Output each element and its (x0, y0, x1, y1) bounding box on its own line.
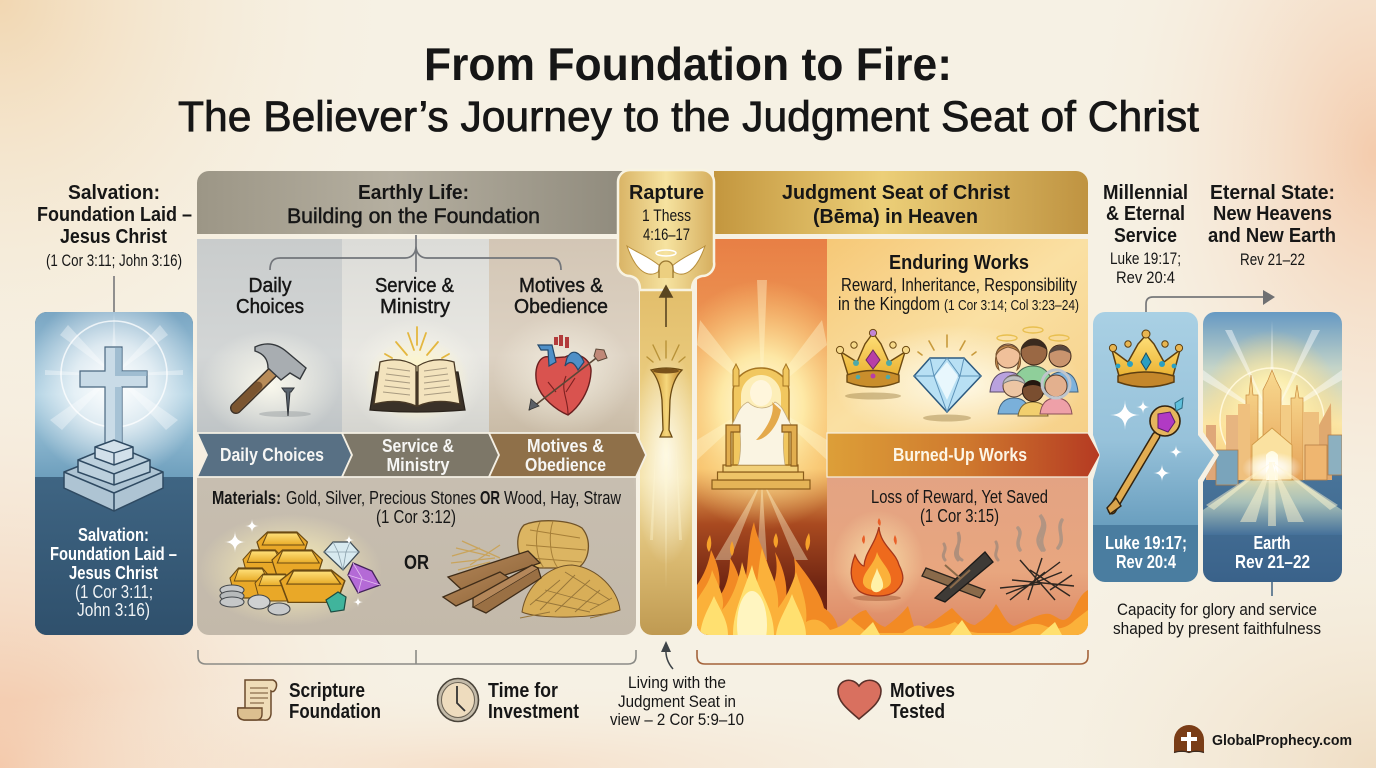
chevron: service and ministry: Service & (382, 436, 454, 456)
enduring works text: Enduring Works (889, 252, 1029, 274)
label: or: OR (404, 552, 429, 574)
arrow: millennial to eternal (1146, 290, 1275, 312)
heading: millennial and eternal service: Luke 19:17; (1110, 249, 1181, 268)
icon: gold, silver and gems (198, 514, 382, 626)
enduring works text (838, 252, 1079, 314)
text: card references (1105, 533, 1187, 572)
bracket: earthly life (198, 650, 636, 664)
legend: motives tested: Motives (890, 680, 955, 702)
icon: anatomical heart with arrow (529, 335, 607, 415)
heading: millennial and eternal service: Service (1114, 225, 1177, 247)
heading: eternal state: New Heavens (1213, 203, 1332, 225)
title (178, 38, 1199, 141)
arrow: up to rapture (661, 641, 673, 669)
panel: salvation card (35, 312, 193, 635)
icon: wood, hay and straw (443, 521, 620, 618)
icon: open bible (365, 327, 469, 422)
panel: earthly life header: Earthly Life: (358, 182, 469, 204)
heading: eternal state: and New Earth (1208, 225, 1336, 247)
icon: scroll (238, 680, 277, 720)
panel: earthly life header (197, 171, 630, 234)
materials text (212, 488, 622, 527)
icon: burnt twigs with smoke (1000, 515, 1074, 600)
heading: salvation: Jesus Christ (60, 226, 167, 248)
rapture text: 1 Thess (642, 206, 691, 225)
heading: eternal state: Rev 21–22 (1240, 250, 1305, 269)
text: card references: Rev 21–22 (1235, 552, 1310, 572)
panel: enduring works (836, 252, 1079, 422)
chevron: motives and obedience: Motives & (527, 436, 604, 456)
text: card references: Rev 20:4 (1116, 552, 1176, 572)
legend: motives tested (890, 680, 955, 723)
icon: scepter (1107, 398, 1183, 514)
bracket: judgment seat (697, 650, 1088, 664)
materials text: (1 Cor 3:12) (376, 507, 456, 527)
icon: crown (1109, 330, 1183, 387)
column labels (236, 275, 608, 318)
note: living with the judgment seat: Living with the (628, 673, 726, 692)
chevron: daily choices (197, 433, 352, 477)
panel: new heavens and new earth card (1202, 312, 1342, 582)
chevron: motives and obedience: Obedience (525, 455, 606, 475)
text: salvation card: Foundation Laid – (50, 544, 177, 564)
text: salvation card: John 3:16) (77, 600, 150, 620)
panel: judgment seat header: Judgment Seat of Christ (782, 181, 1010, 204)
column labels: Motives & (519, 275, 604, 297)
note: capacity for glory (1113, 600, 1321, 638)
legend: time for investment: Investment (488, 701, 579, 723)
materials text: Wood, Hay, Straw (504, 488, 622, 508)
logo: globalprophecy.com: GlobalProphecy.com (1212, 733, 1352, 749)
heading: salvation: (1 Cor 3:11; John 3:16) (46, 251, 182, 270)
heading: salvation: Salvation: (68, 182, 160, 204)
text: card references (1235, 533, 1310, 572)
icon: throne with seated figure (712, 364, 810, 489)
icon: clock (438, 678, 478, 722)
burned-up text: Loss of Reward, Yet Saved (871, 487, 1048, 507)
heading: eternal state: Eternal State: (1210, 182, 1335, 204)
column labels: Choices (236, 296, 304, 318)
chevron: service and ministry (342, 433, 499, 477)
enduring works text: (1 Cor 3:14; Col 3:23–24) (944, 297, 1079, 314)
materials text: Materials: (212, 488, 281, 508)
enduring works text: in the Kingdom (838, 294, 940, 314)
text: salvation card (50, 525, 177, 620)
icon: diamond (914, 335, 981, 422)
icon: hammer and nail (236, 344, 311, 417)
note: capacity for glory: Capacity for glory and service (1117, 600, 1317, 619)
banner: burned-up works: Burned-Up Works (893, 445, 1027, 465)
text: salvation card: Salvation: (78, 525, 149, 545)
note: living with the judgment seat: view – 2 Cor 5:9–10 (610, 710, 744, 729)
icon: angel wings and halo (627, 246, 705, 278)
materials text: OR (480, 488, 500, 508)
heading: salvation: Foundation Laid – (37, 204, 192, 226)
column labels: Daily (248, 275, 292, 297)
heading: millennial and eternal service: Rev 20:4 (1116, 268, 1175, 287)
panel: millennial service card (1093, 312, 1214, 582)
city skyline (1206, 370, 1342, 485)
panel: throne and fire (697, 239, 1088, 635)
burned-up text: (1 Cor 3:15) (920, 506, 999, 526)
icon: charred wood with smoke (922, 532, 998, 602)
materials text: Gold, Silver, Precious Stones (286, 488, 476, 508)
chevron: service and ministry: Ministry (386, 455, 450, 475)
rapture text (629, 182, 704, 244)
burned-up text (871, 487, 1048, 526)
text: card references: Luke 19:17; (1105, 533, 1187, 553)
icon: cross on stone pedestal (64, 347, 163, 511)
heading: salvation (37, 182, 192, 270)
legend: time for investment (488, 680, 579, 723)
icon: trumpet (647, 341, 685, 437)
logo: globalprophecy.com (1174, 725, 1352, 752)
legend: motives tested: Tested (890, 701, 945, 723)
panel: judgment seat header (714, 171, 1088, 234)
enduring works text: Reward, Inheritance, Responsibility (841, 275, 1077, 295)
icon: heart (838, 680, 881, 719)
panel: rapture column (618, 170, 714, 635)
text: card references: Earth (1254, 533, 1290, 553)
arrow: upward (660, 286, 672, 327)
heading: millennial and eternal service (1103, 182, 1188, 287)
icon: jeweled crown (836, 329, 910, 400)
icon: flame (851, 518, 903, 601)
note: living with the judgment seat (610, 673, 744, 729)
text: salvation card: (1 Cor 3:11; (75, 582, 153, 602)
legend: time for investment: Time for (488, 680, 558, 702)
note: living with the judgment seat: Judgment Seat in (618, 692, 736, 711)
rapture text: Rapture (629, 182, 704, 204)
note: capacity for glory: shaped by present faithfulness (1113, 619, 1321, 638)
banner: burned-up works (827, 433, 1100, 477)
panel: judgment seat header: (Bēma) in Heaven (813, 205, 978, 228)
chevron: motives and obedience (489, 433, 646, 477)
legend: scripture foundation: Scripture (289, 680, 365, 702)
title: The Believer’s Journey to the Judgment Seat of Christ (178, 93, 1199, 141)
column labels: Ministry (380, 296, 450, 318)
panel: earthly life header: Building on the Foundation (287, 205, 540, 228)
chevron: daily choices: Daily Choices (220, 445, 324, 465)
heading: eternal state (1208, 182, 1336, 269)
panel: three earthly columns (197, 235, 639, 440)
connector bracket (270, 235, 561, 272)
flames (697, 522, 1088, 635)
panel: burned-up works (851, 487, 1074, 602)
heading: millennial and eternal service: & Eternal (1106, 203, 1185, 225)
text: salvation card: Jesus Christ (69, 563, 158, 583)
column labels: Service & (375, 275, 455, 297)
icon: group of redeemed people (990, 327, 1078, 416)
title: From Foundation to Fire: (424, 38, 952, 90)
rapture text: 4:16–17 (643, 225, 690, 244)
heading: millennial and eternal service: Millennial (1103, 182, 1188, 204)
column labels: Obedience (514, 296, 608, 318)
legend: scripture foundation: Foundation (289, 701, 381, 723)
legend: scripture foundation (289, 680, 381, 723)
panel: materials (197, 477, 636, 635)
